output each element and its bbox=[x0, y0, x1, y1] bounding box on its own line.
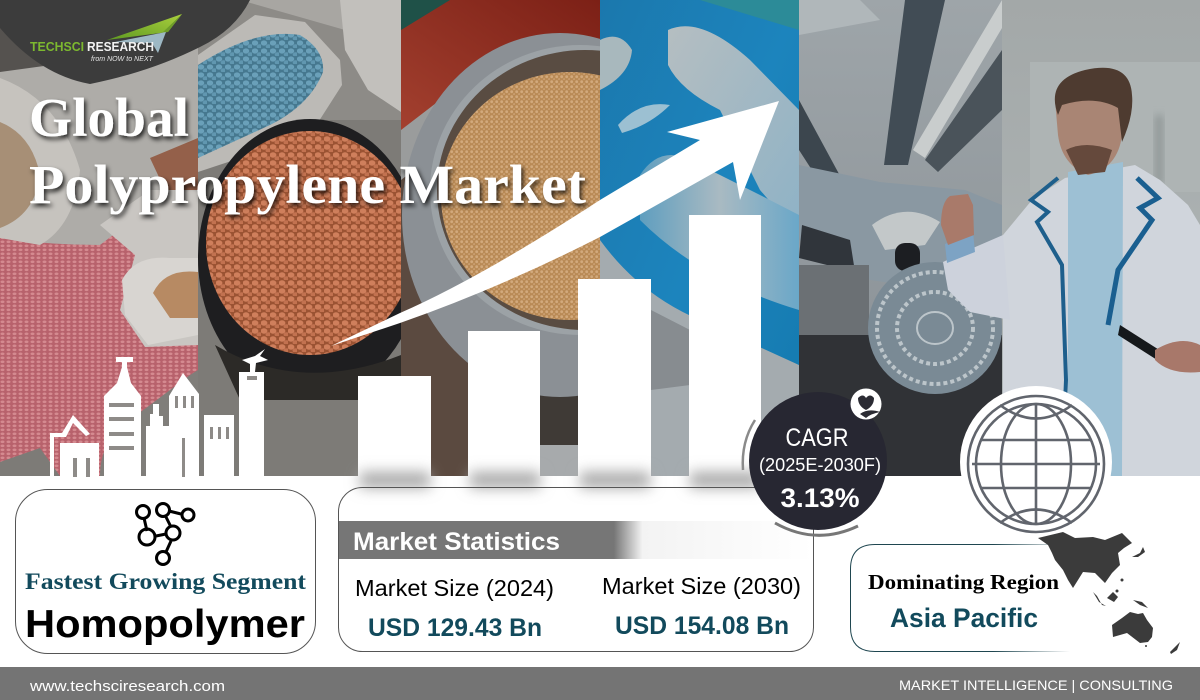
logo wordmark: TECHSCI bbox=[30, 39, 84, 54]
logo badge: RESEARCH bbox=[87, 39, 154, 54]
statistics header bbox=[339, 521, 813, 559]
panel: fastest growing segment bbox=[16, 490, 316, 654]
panel: dominating region bbox=[850, 532, 1180, 654]
logo mark bbox=[107, 14, 182, 53]
stat: 2024 bbox=[355, 575, 554, 642]
stat: 2030: Market Size (2030) bbox=[602, 573, 801, 599]
CAGR badge: (2025E-2030F) bbox=[759, 455, 881, 475]
photo: tan pellets in metal bowl bbox=[401, 0, 600, 476]
icon: Asia Pacific map bbox=[1038, 532, 1180, 654]
white lower band bbox=[0, 476, 1200, 668]
photo: blue and orange pellets bbox=[198, 0, 422, 476]
region value: Asia Pacific bbox=[890, 603, 1038, 633]
icon: small leaf badge bbox=[850, 388, 882, 420]
title: Global bbox=[29, 87, 189, 148]
city skyline icon bbox=[50, 349, 268, 477]
region heading: Dominating Region bbox=[868, 570, 1059, 594]
skyline window details bbox=[73, 376, 257, 477]
segment value: Homopolymer bbox=[25, 603, 305, 646]
footer url: www.techsciresearch.com bbox=[29, 678, 225, 695]
CAGR badge: CAGR bbox=[786, 424, 848, 452]
logo badge bbox=[0, 0, 250, 84]
photo: grey wheel bbox=[799, 0, 1002, 476]
panel: market statistics bbox=[338, 488, 814, 652]
stat: 2030 bbox=[602, 573, 801, 640]
stat: 2024: Market Size (2024) bbox=[355, 575, 554, 601]
stat: 2030: USD 154.08 Bn bbox=[615, 612, 789, 640]
segment heading: Fastest Growing Segment bbox=[25, 569, 306, 594]
logo badge: from NOW to NEXT bbox=[91, 54, 154, 63]
icon: globe bbox=[960, 386, 1112, 538]
photo: blue plastic bbox=[600, 0, 799, 476]
CAGR badge bbox=[743, 388, 887, 535]
footer tagline: MARKET INTELLIGENCE | CONSULTING bbox=[899, 677, 1173, 693]
footer bar bbox=[0, 667, 1200, 700]
bar shadows bbox=[360, 472, 760, 488]
stat: 2024: USD 129.43 Bn bbox=[368, 614, 542, 642]
title: Polypropylene Market bbox=[29, 154, 587, 215]
icon: molecule bbox=[136, 504, 194, 564]
title bbox=[29, 87, 587, 215]
photo: foam roll and pink pellets bbox=[0, 0, 198, 476]
panel: market statistics: Market Statistics bbox=[353, 528, 560, 556]
rising arrow bbox=[331, 101, 779, 346]
CAGR badge: 3.13% bbox=[780, 483, 860, 513]
photo: scientist in lab coat bbox=[941, 0, 1200, 476]
bar chart bbox=[358, 215, 761, 476]
